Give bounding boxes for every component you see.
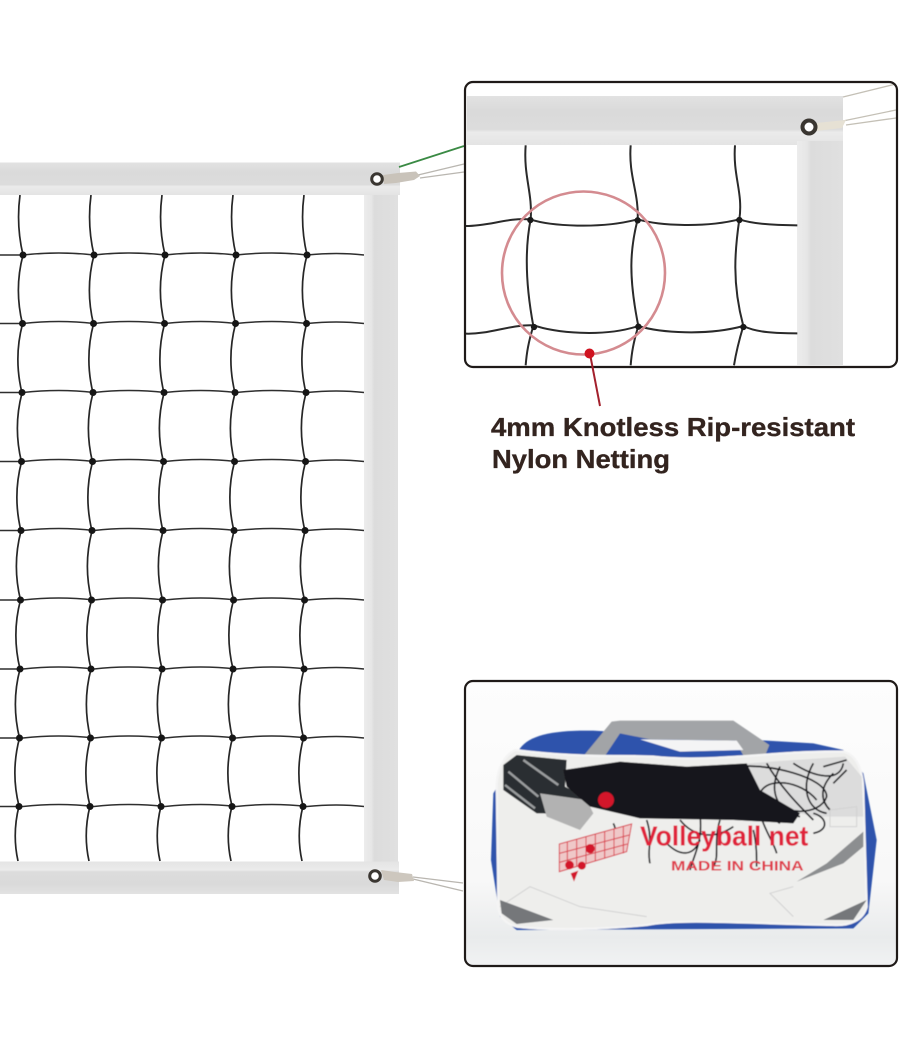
- gap under the handle: [640, 739, 743, 752]
- grey reflection: [540, 793, 593, 830]
- cord sleeve: [381, 870, 414, 882]
- printed net icon: [559, 824, 632, 872]
- grey cords: [413, 877, 463, 891]
- bag print: product name: Volleyball net: [640, 820, 808, 851]
- top grommet: [372, 174, 382, 184]
- inset grommet: [802, 120, 816, 134]
- inset cord sleeve: [816, 120, 846, 131]
- cord sleeve: [383, 172, 420, 184]
- bundled net: [563, 762, 800, 823]
- callout text: Nylon Netting: [492, 444, 670, 474]
- bag handles: [581, 721, 769, 760]
- main net: [0, 162, 400, 894]
- top net tape: [0, 162, 400, 195]
- callout text: [491, 412, 855, 474]
- pointer dot: [584, 348, 594, 358]
- close-up tape, right: [797, 141, 843, 365]
- loose net loops: [603, 760, 847, 870]
- close-up tape, top: [467, 96, 843, 145]
- bottom dark strip: [500, 900, 867, 924]
- net mesh: [0, 195, 364, 861]
- inset panel: netting close-up: [465, 82, 897, 367]
- green cord: [399, 146, 464, 167]
- bag print: origin: MADE IN CHINA: [671, 857, 804, 873]
- top cords to inset: [372, 146, 464, 184]
- carry bag: [491, 721, 877, 930]
- bottom cords: [370, 870, 463, 891]
- inset cords: [838, 84, 896, 125]
- pointer line: [590, 354, 600, 406]
- close-up mesh: [466, 145, 797, 365]
- panel background: [465, 681, 897, 966]
- bag blue body: [491, 731, 877, 930]
- inset panel: carry bag: [465, 681, 897, 966]
- bottom grommet: [370, 871, 380, 881]
- panel border: [465, 82, 897, 367]
- light interior, right: [747, 757, 863, 817]
- grey corner reflection: [797, 832, 863, 882]
- printed ball and player marks: [565, 792, 614, 882]
- panel border: [465, 681, 897, 966]
- dark interior, top left: [503, 755, 590, 817]
- grey cords: [418, 164, 464, 178]
- callout text: 4mm Knotless Rip-resistant: [491, 412, 855, 442]
- panel background: [465, 82, 897, 367]
- white cloth folds: [500, 807, 857, 917]
- right net tape: [364, 190, 398, 865]
- highlight circle: [502, 192, 665, 354]
- clear front panel: [497, 750, 867, 929]
- callout pointer: [584, 348, 600, 406]
- white streaks in the dark corner: [505, 760, 558, 808]
- bottom net tape: [0, 862, 399, 894]
